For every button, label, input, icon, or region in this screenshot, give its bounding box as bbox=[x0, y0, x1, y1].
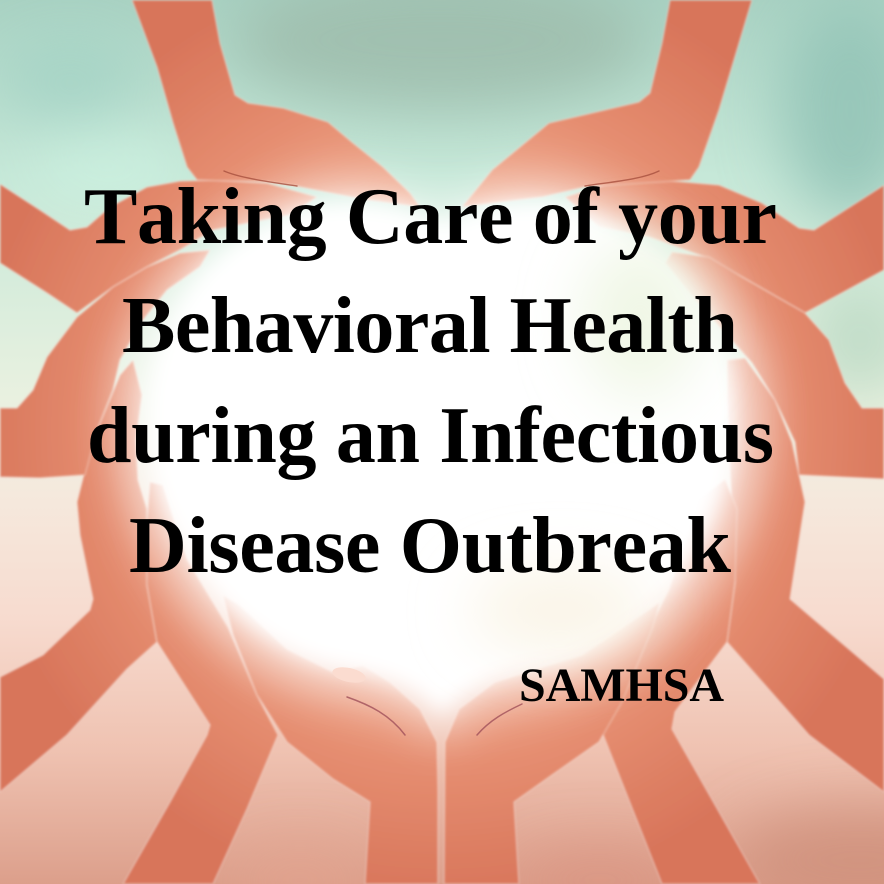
title: Behavioral Health bbox=[122, 282, 738, 370]
right hand: bottom cupped hand bbox=[444, 602, 660, 884]
right hand: lower inner arm bbox=[602, 479, 760, 884]
left hand: top arm bbox=[132, 0, 420, 207]
left hand: side arm bbox=[0, 180, 317, 313]
glowing heart centre bbox=[149, 203, 735, 715]
left hand: mid arm bbox=[0, 250, 210, 478]
right hand: mid arm bbox=[665, 252, 884, 479]
left hand: lower inner arm bbox=[123, 482, 278, 884]
palm creases and thumbnail details bbox=[224, 171, 659, 735]
right hand: lower arm rising up bbox=[727, 358, 884, 792]
title: Taking Care of your bbox=[84, 173, 777, 261]
title bbox=[84, 173, 777, 590]
cream tint inside heart bbox=[470, 240, 700, 650]
title: during an Infectious bbox=[87, 392, 774, 480]
left hand: bottom cupped hand bbox=[223, 595, 438, 884]
right hand: top arm bbox=[462, 0, 752, 207]
title: Disease Outbreak bbox=[129, 502, 732, 590]
left hand: lower arm rising up bbox=[0, 360, 157, 792]
outer soft glow over fingers bbox=[116, 182, 768, 742]
source label: SAMHSA bbox=[519, 659, 724, 712]
right hand: side arm bbox=[565, 180, 884, 313]
